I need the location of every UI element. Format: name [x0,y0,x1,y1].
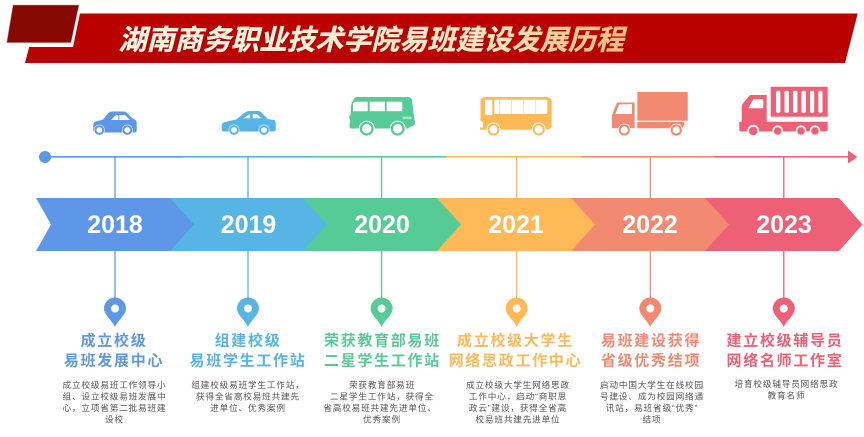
description: 讯站，易班省级“优秀” [606,402,698,413]
arrow: 2019: 2019 [221,211,276,239]
description: 二星学生工作站，获得全 [330,390,434,402]
icon: pin [506,298,528,327]
description: 成立校级大学生网络思政 [466,379,570,390]
icon: light blue car [222,111,276,135]
heading: 成立校级大学生 [457,332,574,350]
arrow: 2023 [705,198,862,251]
icon: blue car [93,112,137,135]
arrow: 2018: 2018 [87,211,143,239]
heading: 易班发展中心 [64,352,164,370]
icon: pin [639,298,661,327]
heading: 建立校级辅导员 [727,332,843,350]
icon: pin [371,298,393,327]
description: 政云”建设，获得全省高 [469,402,567,413]
description: 省高校易班共建先进单位、 [323,402,437,413]
heading: 省级优秀结项 [601,352,701,370]
arrow: 2020 [303,198,461,251]
description: 荣获教育部易班 [349,379,415,390]
description: 设校 [105,414,124,424]
description: 优秀案例 [363,414,401,424]
icon: pin [773,298,795,327]
heading: 成立校级 [81,332,147,350]
description: 结项 [643,414,661,424]
heading: 二星学生工作站 [324,352,441,370]
description: 获得全省高校易班共建先 [196,390,300,402]
column: 2022 [600,298,704,424]
heading: 组建校级 [215,332,281,350]
title banner [4,4,858,63]
heading: 易班建设获得 [601,332,701,350]
description: 校易班共建先进单位 [476,414,560,424]
icon: yellow bus [480,97,552,136]
title: 湖南商务职业技术学院易班建设发展历程 [117,25,630,56]
arrow: 2021: 2021 [488,211,544,239]
arrow: 2022: 2022 [622,211,678,239]
heading: 网络名师工作室 [727,352,843,370]
arrow: 2022 [571,198,729,251]
icon: salmon box truck [612,92,688,136]
description: 启动中国大学生在线校园 [600,379,704,390]
heading: 易班学生工作站 [190,352,306,370]
icon: pin [104,298,126,327]
description: 进单位、优秀案例 [210,402,286,413]
icon: red container truck [739,87,828,137]
description: 组、设立校级易班发展中 [63,390,166,402]
timeline axis with arrow [39,150,858,164]
arrow: 2018 [36,198,194,251]
column: 2021 [449,298,582,424]
heading: 荣获教育部易班 [324,332,441,350]
description: 教育名师 [768,390,805,400]
column: 2020 [323,298,441,424]
column: 2019 [190,298,306,413]
arrow: 2021 [437,198,595,251]
description: 培育校级辅导员网络思政 [735,378,838,389]
arrow: 2023: 2023 [756,211,812,239]
description: 成立校级易班工作领导小 [63,379,166,390]
arrow: 2019 [170,198,327,251]
column: 2023 [727,298,843,400]
year arrow band [36,198,862,251]
column: 2018 [63,298,166,424]
description: 号建设、成为校园网络通 [600,390,704,402]
arrow: 2020: 2020 [354,211,410,239]
icon: pin [237,298,259,327]
description: 组建校级易班学生工作站， [191,379,305,390]
heading: 网络思政工作中心 [449,352,582,370]
description: 工作中心，启动“商职思 [469,390,567,402]
vertical connector lines [115,157,784,300]
icon: green minibus [349,97,415,137]
description: 心，立项省第二批易班建 [63,402,166,413]
